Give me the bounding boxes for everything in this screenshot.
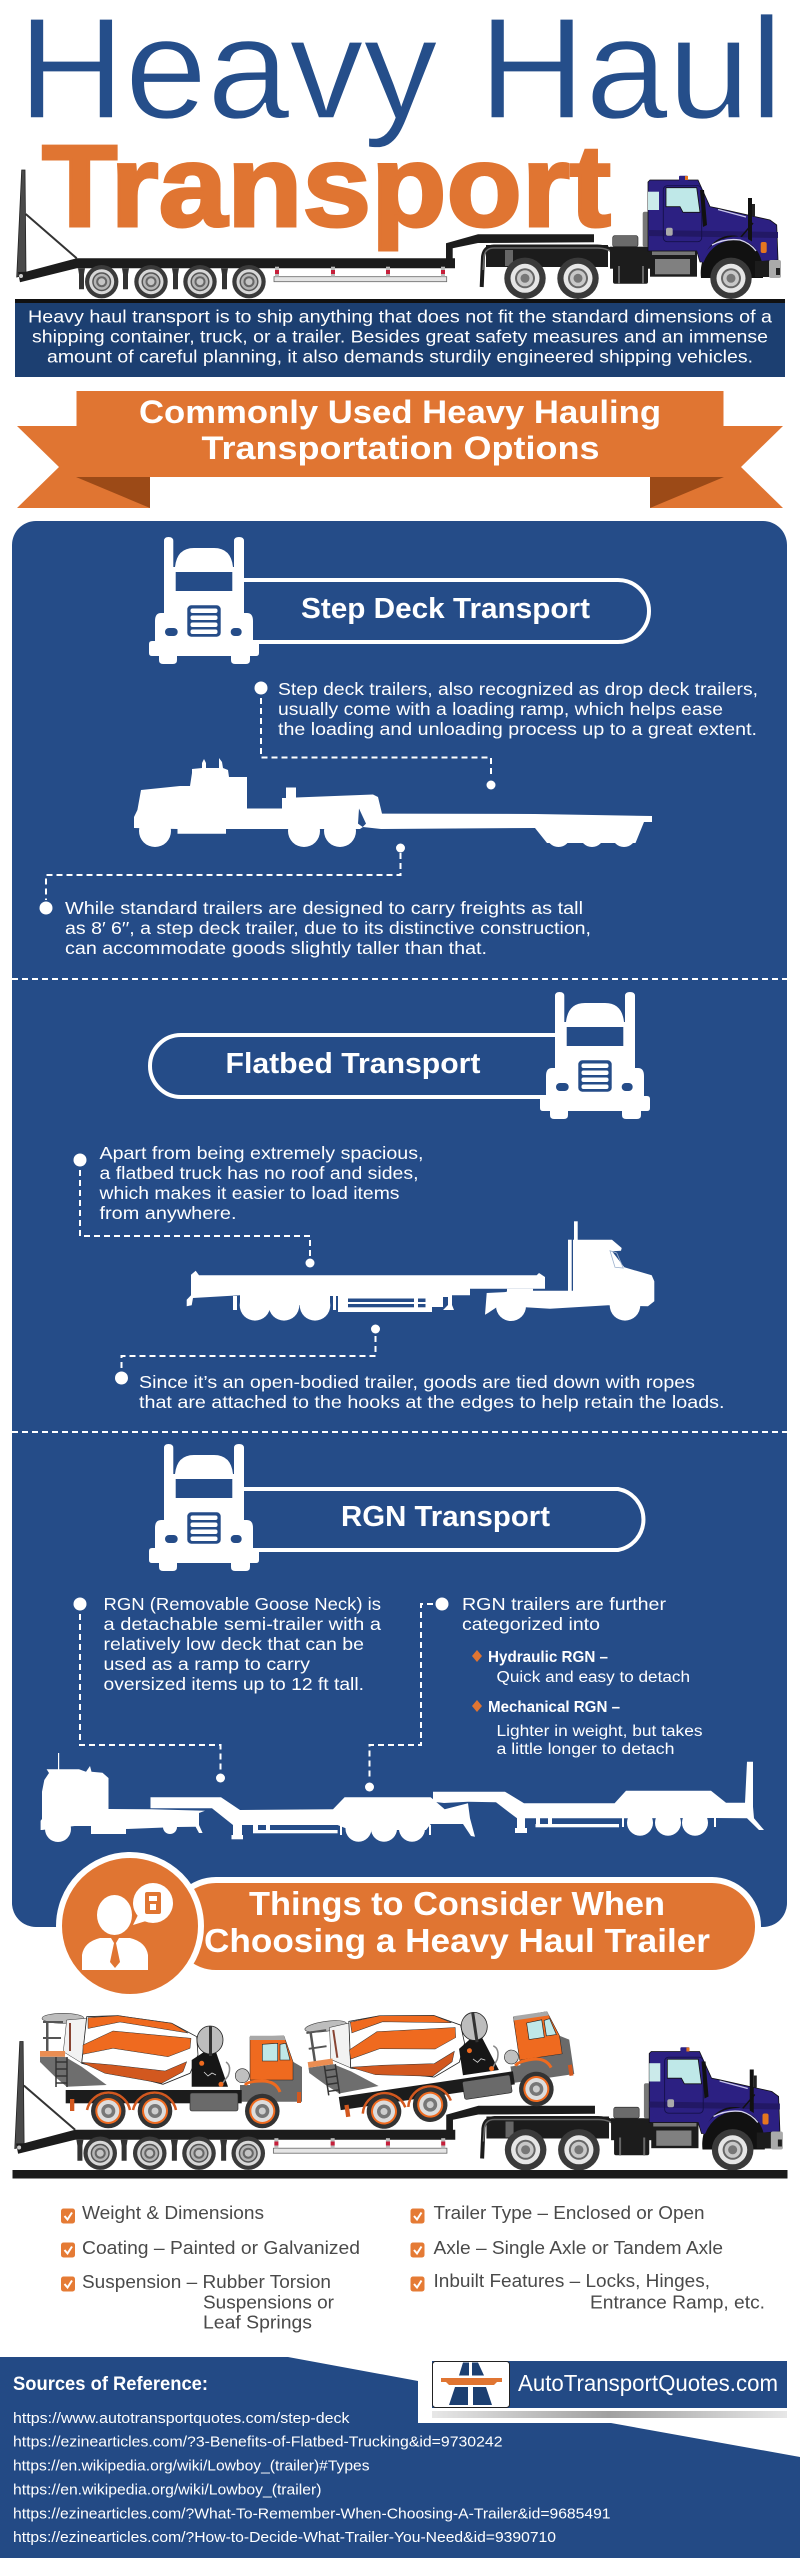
road strip [15, 299, 785, 304]
text: spacious flatbed: Apart from being extremely spacious, [100, 1143, 424, 1163]
icon: truck front [540, 992, 650, 1119]
section: flatbed [74, 992, 724, 1412]
heading badge: things to consider: Choosing a Heavy Haul Trailer [204, 1922, 710, 1959]
silhouette: RGN truck and trailers [41, 1753, 764, 1842]
ribbon banner heading [17, 391, 783, 508]
connector: RGN categories to trailer [365, 1604, 433, 1792]
check item: weight: Weight & Dimensions [82, 2203, 264, 2223]
source links: https://en.wikipedia.org/wiki/Lowboy_(trailer) [13, 2482, 322, 2498]
check item: inbuilt features [410, 2271, 765, 2312]
intro text panel: shipping container, truck, or a trailer. Besides great safety measures and an immense [32, 326, 768, 346]
text: step deck ramp: Step deck trailers, also recognized as drop deck trailers, [278, 679, 758, 699]
text: RGN categories: RGN trailers are further [462, 1594, 666, 1614]
text: RGN definition: RGN (Removable Goose Neck) is [104, 1594, 381, 1614]
check item: axle: Axle – Single Axle or Tandem Axle [434, 2238, 723, 2258]
icon: truck front [149, 1444, 259, 1571]
check item: inbuilt features: Inbuilt Features – Locks, Hinges, [434, 2271, 710, 2291]
check item: coating: Coating – Painted or Galvanized [82, 2238, 360, 2258]
silhouette: step deck truck [134, 758, 652, 847]
source links: https://ezinearticles.com/?How-to-Decide-What-Trailer-You-Need&id=9390710 [13, 2529, 556, 2546]
silhouette: flatbed truck [187, 1221, 654, 1321]
connector: RGN definition to trailer [80, 1614, 225, 1782]
check item: suspension [61, 2272, 334, 2332]
text: RGN categories [436, 1594, 703, 1758]
heading pill: step deck: Step Deck Transport [301, 593, 590, 625]
illustration: lowboy truck and trailer [17, 170, 781, 299]
icon: person with truck thought [82, 1883, 173, 1970]
ribbon banner heading: Commonly Used Heavy Hauling [139, 394, 661, 430]
source links: https://www.autotransportquotes.com/step-deck [13, 2410, 350, 2427]
check item: inbuilt features: Entrance Ramp, etc. [590, 2292, 765, 2312]
heading pill: step deck [240, 580, 649, 642]
logo: AutoTransportQuotes.com [432, 2361, 787, 2418]
footer: sources [0, 2357, 800, 2558]
heading pill: flatbed [150, 1035, 560, 1097]
text: RGN categories: Lighter in weight, but takes [496, 1723, 703, 1740]
section: step deck [40, 537, 758, 958]
text: standard trailers: as 8′ 6′′, a step deck trailer, due to its distinctive construction, [65, 918, 591, 938]
check item: trailer type: Trailer Type – Enclosed or Open [434, 2203, 704, 2223]
panel: transport types [12, 521, 787, 1927]
checklist: considerations [61, 2203, 765, 2332]
intro text panel [15, 303, 785, 377]
text: standard trailers: can accommodate goods slightly taller than that. [65, 938, 487, 958]
logo: AutoTransportQuotes.com: AutoTransportQuotes.com [518, 2370, 778, 2396]
text: spacious flatbed [74, 1143, 424, 1223]
text: spacious flatbed: from anywhere. [100, 1203, 236, 1223]
heading badge: things to consider: Things to Consider When [249, 1885, 665, 1922]
intro text panel: Heavy haul transport is to ship anything that does not fit the standard dimensions of a [28, 306, 772, 326]
text: step deck ramp: usually come with a loading ramp, which helps ease [278, 699, 723, 719]
icon: truck front [149, 537, 259, 664]
check item: suspension: Leaf Springs [203, 2312, 312, 2332]
intro text panel: amount of careful planning, it also demands sturdily engineered shipping vehicles. [47, 346, 753, 366]
text: open-bodied trailer [115, 1372, 724, 1412]
text: standard trailers: While standard trailers are designed to carry freights as tall [65, 898, 583, 918]
text: open-bodied trailer: Since it’s an open-bodied trailer, goods are tied down with ropes [139, 1372, 695, 1392]
text: step deck ramp [254, 679, 758, 739]
source links: https://ezinearticles.com/?3-Benefits-of-Flatbed-Trucking&id=9730242 [13, 2434, 502, 2450]
text: RGN categories: Mechanical RGN – [488, 1699, 620, 1716]
heading pill: RGN: RGN Transport [341, 1501, 550, 1533]
connector: flatbed to text [122, 1324, 380, 1370]
heading badge: things to consider [59, 1855, 758, 1997]
text: RGN definition [74, 1594, 381, 1694]
heading pill: flatbed: Flatbed Transport [226, 1048, 481, 1080]
connector: text to flatbed [80, 1170, 314, 1268]
source links: https://ezinearticles.com/?What-To-Remember-When-Choosing-A-Trailer&id=9685491 [13, 2506, 610, 2522]
text: RGN definition: a detachable semi-trailer with a [104, 1614, 381, 1634]
text: standard trailers [40, 898, 591, 958]
title line: Transport: Transport [42, 121, 611, 251]
source links: https://en.wikipedia.org/wiki/Lowboy_(trailer)#Types [13, 2458, 369, 2474]
connector: trailer to text [46, 844, 405, 900]
illustration: lowboy carrying cement mixers [12, 1987, 788, 2178]
check item: suspension: Suspensions or [203, 2292, 334, 2312]
connector: text to trailer [261, 698, 496, 790]
ribbon banner heading: Transportation Options [202, 430, 600, 466]
text: spacious flatbed: a flatbed truck has no roof and sides, [100, 1163, 418, 1183]
text: spacious flatbed: which makes it easier to load items [98, 1183, 400, 1203]
text: step deck ramp: the loading and unloading process up to a great extent. [278, 719, 757, 739]
check item: suspension: Suspension – Rubber Torsion [82, 2272, 331, 2292]
text: open-bodied trailer: that are attached to the hooks at the edges to help retain the loads. [139, 1392, 724, 1412]
heading pill: RGN [240, 1489, 643, 1550]
source links [13, 2410, 610, 2546]
text: RGN definition: used as a ramp to carry [104, 1654, 310, 1674]
title [18, 0, 783, 251]
text: RGN categories: Quick and easy to detach [496, 1669, 690, 1686]
text: RGN categories: categorized into [462, 1614, 600, 1634]
text: RGN definition: relatively low deck that can be [104, 1634, 364, 1654]
text: RGN definition: oversized items up to 12 ft tall. [104, 1674, 364, 1694]
text: RGN categories: a little longer to detach [496, 1741, 674, 1758]
heading: sources: Sources of Reference: [13, 2374, 208, 2395]
text: RGN categories: Hydraulic RGN – [488, 1649, 608, 1666]
section: RGN [41, 1444, 764, 1842]
